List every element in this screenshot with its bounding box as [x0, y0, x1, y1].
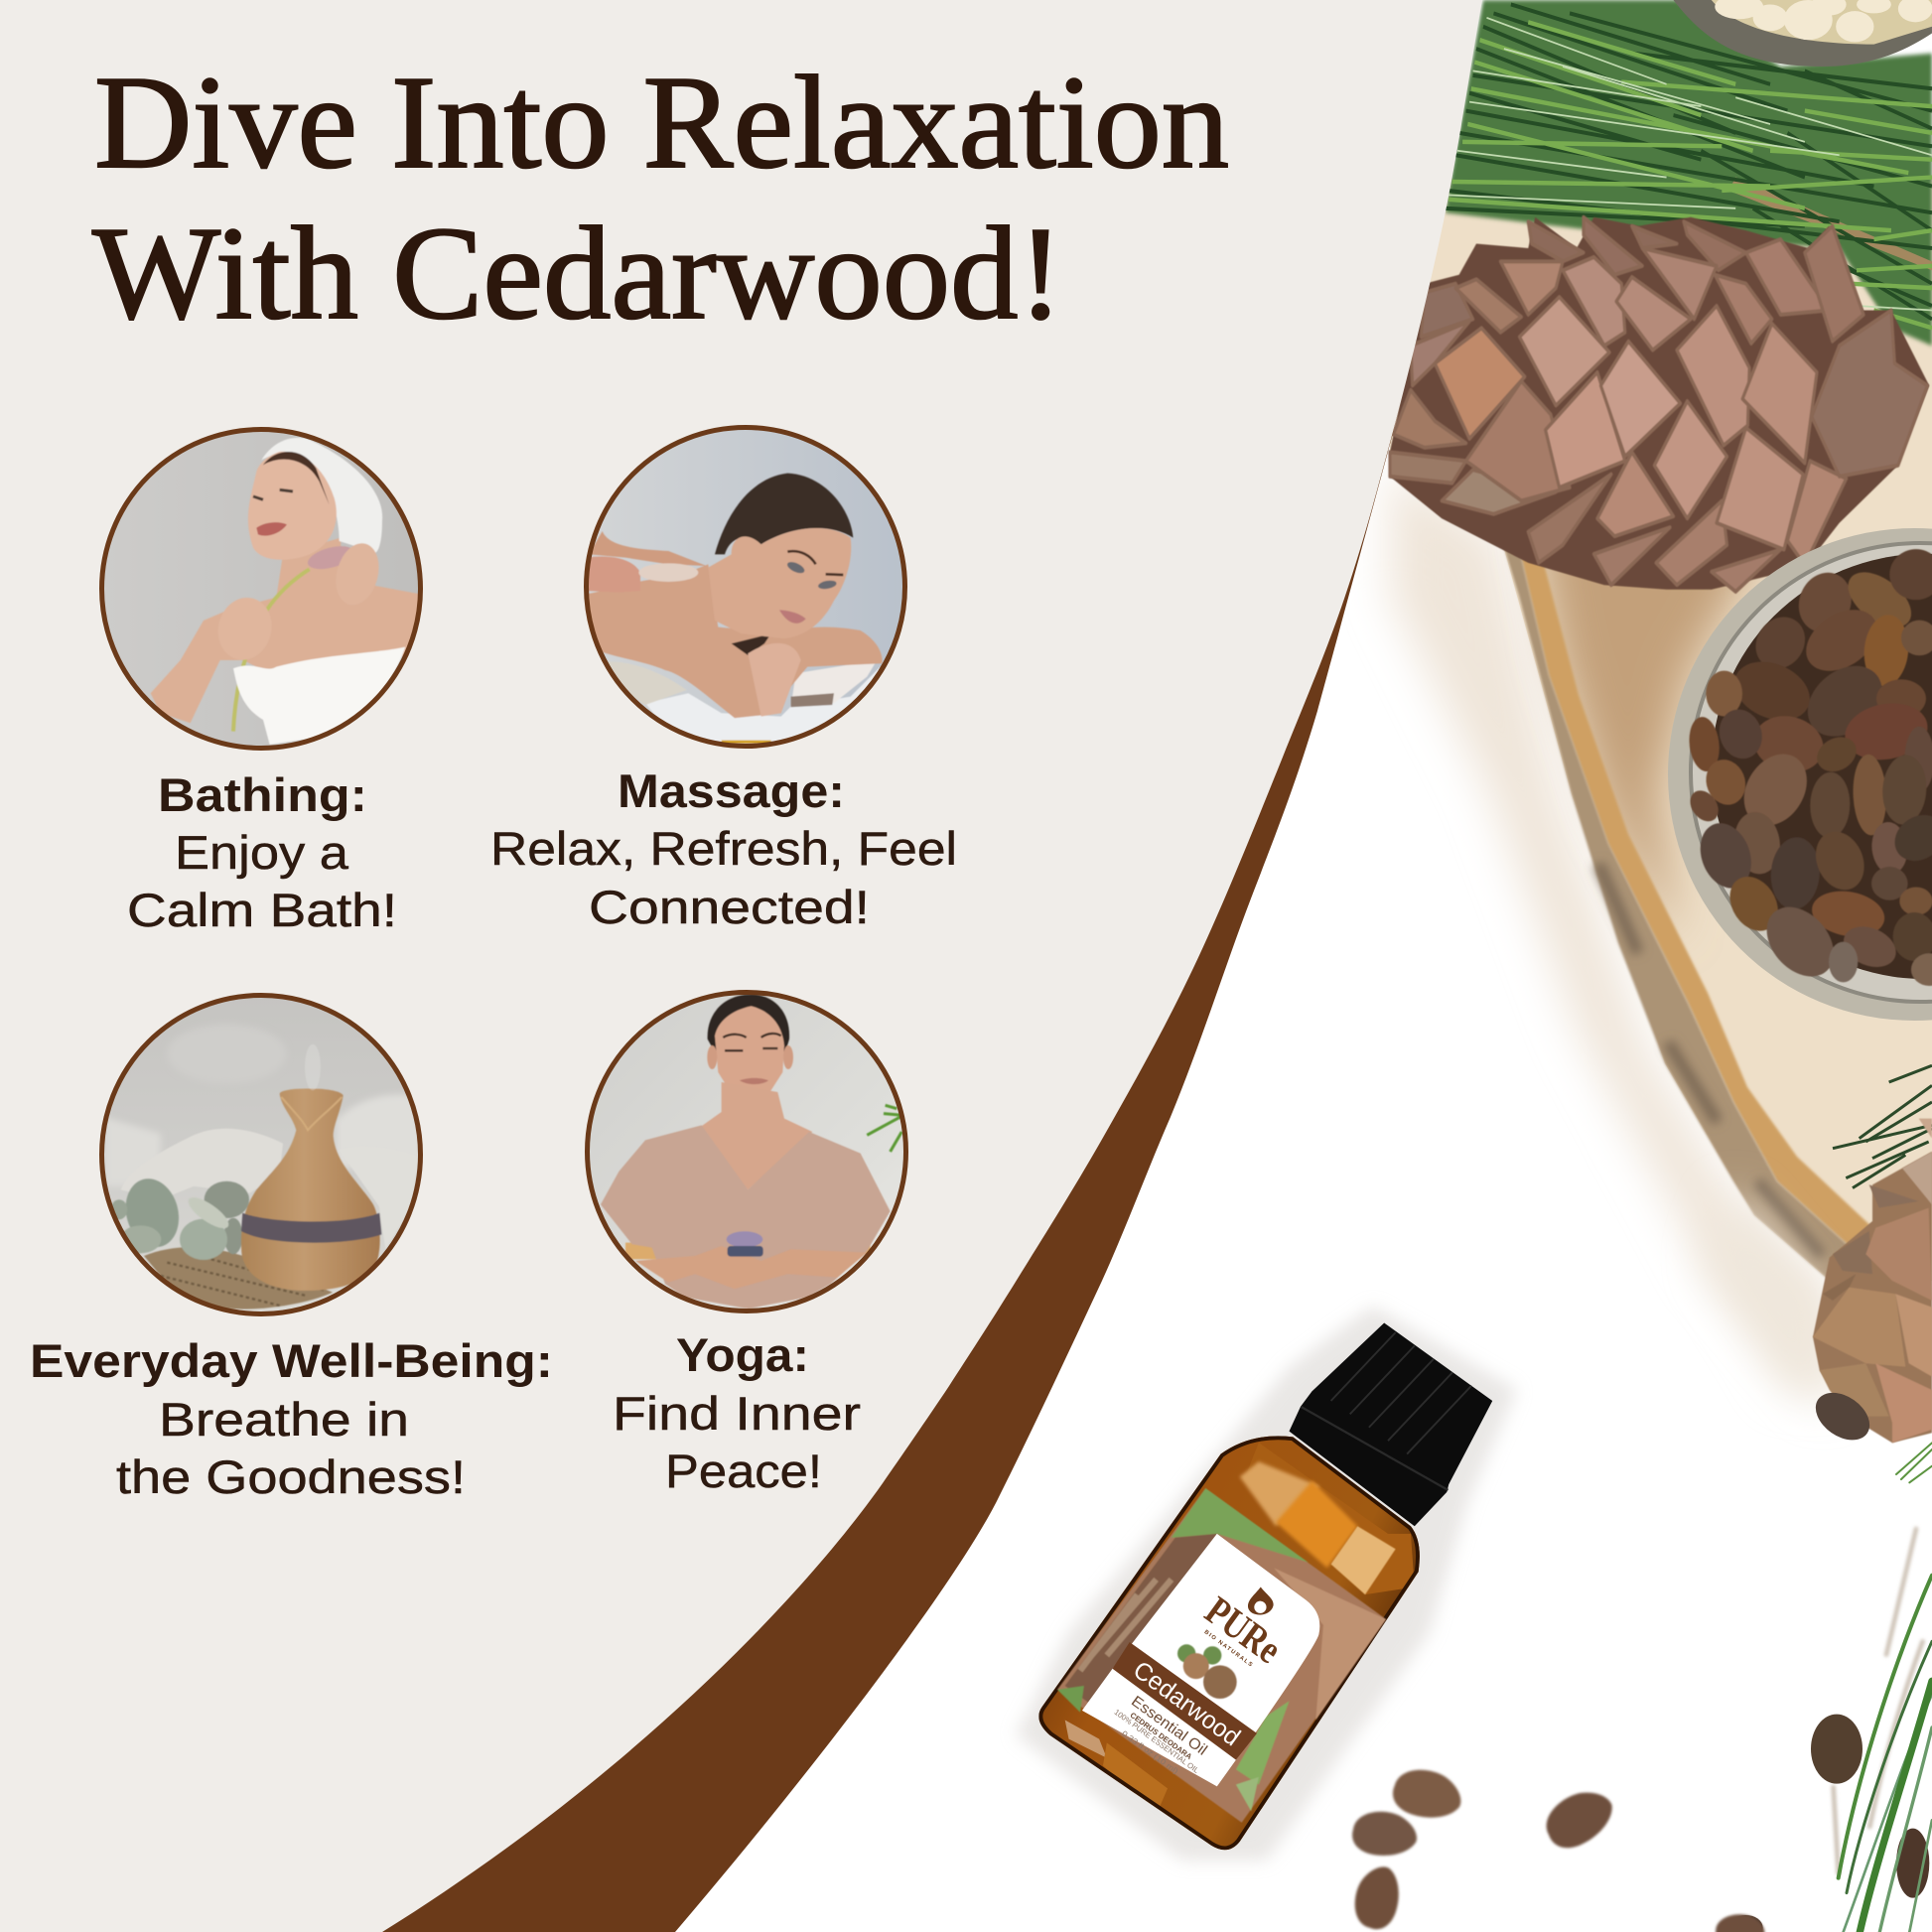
panel: yoga	[586, 991, 908, 1497]
glass bowl interior	[1712, 554, 1932, 979]
panel: everyday well-being	[30, 994, 553, 1503]
cedar nuts in bowl	[1685, 549, 1932, 990]
caption: yoga: Peace!	[665, 1445, 822, 1497]
white label panel	[1082, 1534, 1319, 1786]
label text: 100% PURE ESSENTIAL OIL	[1113, 1708, 1200, 1775]
circle border	[101, 429, 421, 749]
top right bowl of shelled pine nuts	[1674, 0, 1932, 67]
pine needles upper right	[1446, 0, 1932, 345]
caption: massage: Massage:	[618, 764, 845, 817]
scattered cedar nuts	[1348, 1763, 1764, 1932]
brown name band	[1113, 1642, 1257, 1760]
brand logo: BIO NATURALS	[1203, 1629, 1253, 1668]
cone silhouette	[1813, 1152, 1932, 1443]
label text: Cedarwood	[1128, 1656, 1245, 1751]
caption: yoga: Yoga:	[676, 1328, 809, 1381]
needles	[1839, 1443, 1932, 1932]
caption: yoga	[613, 1328, 861, 1497]
circle border	[588, 993, 905, 1311]
bottle shadow	[1016, 1306, 1517, 1861]
label text: 0.33 fl oz (10 ml)	[1120, 1728, 1180, 1776]
caption: bathing: Calm Bath!	[127, 884, 397, 936]
caption: everyday well-being: Breathe in	[159, 1393, 409, 1446]
curved brown band	[382, 397, 1402, 1932]
label artwork	[1057, 1488, 1386, 1823]
circle border	[101, 995, 421, 1314]
circle border	[586, 427, 905, 747]
icon: woman with towel photo	[99, 427, 427, 755]
label text: Essential Oil	[1128, 1693, 1210, 1759]
caption: massage	[490, 764, 957, 933]
black ribbed cap	[1290, 1323, 1492, 1526]
glass bowl rim	[1668, 528, 1932, 1021]
mini cones on label	[1177, 1644, 1237, 1699]
icon: meditating woman photo	[586, 991, 908, 1313]
brand logo: PURe	[1197, 1587, 1290, 1672]
caption: yoga: Find Inner	[613, 1387, 861, 1440]
wooden board slice	[1390, 179, 1932, 1281]
product: cedarwood essential oil bottle	[1016, 1306, 1517, 1861]
caption: massage: Connected!	[589, 881, 870, 933]
board shadow	[1390, 467, 1827, 1410]
pine needles bottom right	[1728, 1443, 1932, 1932]
pine cone	[1390, 217, 1929, 592]
sprig of needles	[1833, 1065, 1932, 1188]
panel: bathing	[99, 427, 427, 936]
caption: bathing: Enjoy a	[175, 826, 349, 879]
label text: CEDRUS DEODARA	[1129, 1711, 1194, 1761]
cone shadow on table	[1708, 1191, 1837, 1390]
caption: bathing	[127, 768, 397, 936]
amber glass body	[1031, 1432, 1426, 1857]
caption: everyday well-being: the Goodness!	[116, 1450, 466, 1503]
title	[92, 49, 1229, 346]
icon: massage photo	[585, 426, 907, 750]
panel: massage	[490, 426, 957, 933]
title line 1: Dive Into Relaxation	[94, 49, 1229, 196]
seed at bottom edge	[1728, 1915, 1763, 1932]
cone scales	[1813, 1119, 1932, 1443]
seed at right edge	[1896, 1829, 1929, 1898]
caption: bathing: Bathing:	[158, 768, 367, 821]
cream curved panel	[0, 0, 1482, 1932]
seed beside cone	[1807, 1383, 1878, 1449]
caption: everyday well-being	[30, 1334, 553, 1503]
photo: wooden board with pine needles, cone and seeds	[1390, 0, 1932, 1449]
caption: everyday well-being: Everyday Well-Being:	[30, 1334, 553, 1387]
title line 2: With Cedarwood!	[92, 200, 1063, 346]
caption: massage: Relax, Refresh, Feel	[490, 822, 957, 875]
lower right pine cone and sprig	[1807, 1065, 1932, 1449]
glass bowl inner wall	[1691, 543, 1932, 1002]
icon: wooden diffuser photo	[101, 994, 424, 1316]
needle shadows	[1834, 1529, 1923, 1873]
seed behind needles	[1811, 1715, 1863, 1784]
